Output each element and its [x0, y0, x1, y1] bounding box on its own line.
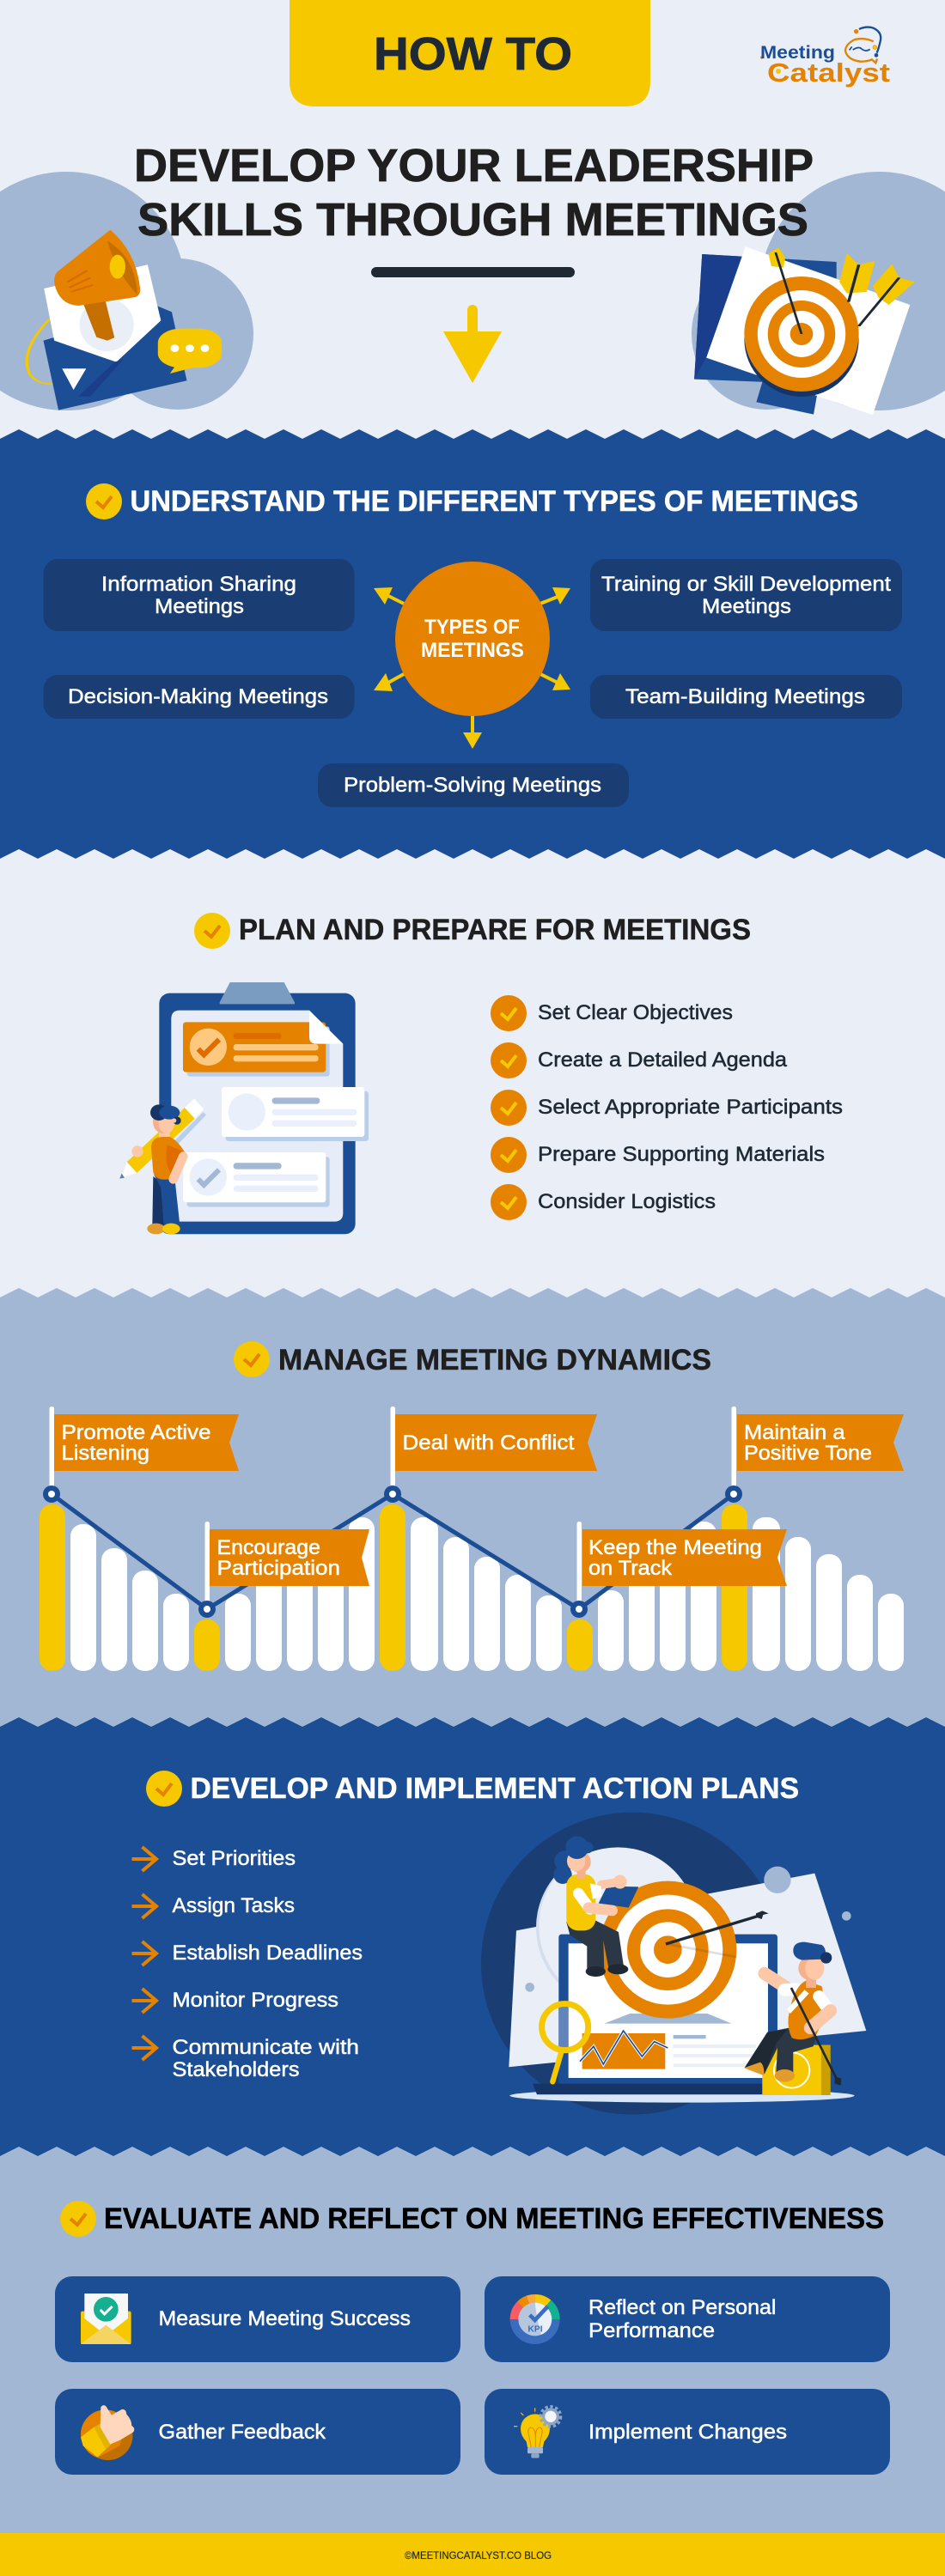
flag: deal with conflict	[384, 1406, 597, 1503]
card: gather feedback: Gather Feedback	[158, 2421, 326, 2444]
panel: manage meeting dynamics	[0, 1288, 945, 1727]
center circle: types of meetings	[395, 562, 550, 716]
icon: KPI gauge: KPI	[527, 2324, 543, 2334]
item: assign tasks: Assign Tasks	[172, 1894, 295, 1917]
center circle: types of meetings: TYPES OF	[424, 616, 520, 639]
logo: Meeting Catalyst: Meeting	[760, 43, 835, 63]
item: monitor progress: Monitor Progress	[172, 1989, 338, 2012]
item: create a detailed agenda	[491, 1042, 788, 1078]
heading: MANAGE MEETING DYNAMICS	[278, 1344, 711, 1376]
item: communicate with stakeholders: Communicate with	[172, 2036, 359, 2059]
flag: encourage participation: Participation	[216, 1557, 340, 1580]
flag: encourage participation	[198, 1522, 369, 1618]
checklist	[491, 995, 843, 1220]
flag: deal with conflict: Deal with Conflict	[402, 1431, 575, 1455]
card: reflect on personal performance: Performance	[588, 2319, 715, 2342]
title: SKILLS THROUGH MEETINGS	[137, 194, 808, 246]
item: establish deadlines: Establish Deadlines	[172, 1941, 363, 1965]
panel: understand the different types of meetings	[0, 429, 945, 859]
item: create a detailed agenda: Create a Detailed Agenda	[538, 1048, 788, 1072]
card: reflect on personal performance	[485, 2276, 890, 2362]
panel: footer: ©MEETINGCATALYST.CO BLOG	[405, 2549, 552, 2561]
item: prepare supporting materials	[491, 1137, 825, 1173]
panel: header	[0, 0, 945, 415]
card: measure meeting success: Measure Meeting Success	[158, 2307, 411, 2330]
item: consider logistics	[491, 1184, 716, 1220]
person: woman sitting on target	[553, 1836, 638, 1977]
item: set priorities	[132, 1847, 296, 1871]
item: communicate with stakeholders	[132, 2036, 359, 2081]
item: set priorities: Set Priorities	[172, 1847, 296, 1870]
item: prepare supporting materials: Prepare Supporting Materials	[538, 1143, 825, 1166]
flag: promote active listening: Listening	[62, 1442, 149, 1465]
card: problem-solving meetings	[318, 763, 629, 807]
heading: DEVELOP AND IMPLEMENT ACTION PLANS	[191, 1772, 799, 1805]
item: communicate with stakeholders: Stakeholders	[172, 2058, 299, 2081]
item: set clear objectives	[491, 995, 733, 1031]
card: decision-making meetings: Decision-Making Meetings	[68, 685, 328, 708]
flag: keep the meeting on track	[570, 1522, 787, 1618]
card: implement changes: Implement Changes	[588, 2421, 787, 2444]
left background blobs	[0, 172, 253, 410]
flag: maintain a positive tone: Maintain a	[744, 1421, 845, 1444]
heading: UNDERSTAND THE DIFFERENT TYPES OF MEETINGS	[131, 485, 858, 518]
clipboard illustration	[119, 982, 372, 1238]
icon: thumbs up	[81, 2405, 134, 2460]
card: training or skill development meetings: Training or Skill Development	[601, 573, 891, 596]
action list	[132, 1847, 363, 2081]
flag: encourage participation: Encourage	[216, 1536, 320, 1559]
flag: keep the meeting on track: Keep the Meeting	[588, 1536, 762, 1559]
arrows from center	[374, 587, 570, 749]
flag: maintain a positive tone	[725, 1406, 904, 1503]
flag: promote active listening	[43, 1406, 239, 1503]
how to badge: HOW TO	[374, 28, 572, 80]
item: set clear objectives: Set Clear Objectives	[538, 1001, 733, 1024]
person with pencil	[119, 1098, 206, 1234]
heading: EVALUATE AND REFLECT ON MEETING EFFECTIVENESS	[104, 2202, 884, 2235]
title	[134, 140, 814, 246]
card: team-building meetings: Team-Building Meetings	[625, 685, 865, 708]
card: team-building meetings	[590, 675, 902, 719]
right background blobs	[692, 172, 945, 410]
card: implement changes	[485, 2389, 890, 2475]
card: gather feedback	[55, 2389, 460, 2475]
yellow box with circle	[762, 2045, 831, 2095]
illustration: target, laptop and people	[481, 1813, 866, 2115]
panel: develop and implement action plans	[0, 1717, 945, 2156]
logo: Meeting Catalyst: Catalyst	[767, 58, 890, 88]
bar chart	[40, 1504, 904, 1671]
heading: PLAN AND PREPARE FOR MEETINGS	[239, 914, 751, 946]
person: man with arrow	[744, 1942, 841, 2086]
icon: KPI gauge	[510, 2294, 560, 2344]
panel: footer	[0, 2533, 945, 2576]
icon: envelope with check	[81, 2293, 131, 2344]
item: select appropriate participants: Select Appropriate Participants	[538, 1096, 843, 1119]
logo: Meeting Catalyst	[760, 27, 890, 88]
trend line	[52, 1494, 734, 1609]
item: consider logistics: Consider Logistics	[538, 1190, 716, 1213]
card: decision-making meetings	[43, 675, 354, 719]
card: information sharing meetings	[43, 559, 354, 631]
title: DEVELOP YOUR LEADERSHIP	[134, 140, 814, 191]
icon: light bulb and gear	[514, 2407, 561, 2458]
flag: promote active listening: Promote Active	[62, 1421, 211, 1444]
card: reflect on personal performance: Reflect on Personal	[588, 2296, 777, 2319]
how to badge	[290, 0, 650, 106]
arrow: down	[443, 305, 502, 383]
flag: keep the meeting on track: on Track	[588, 1557, 673, 1580]
flag: maintain a positive tone: Positive Tone	[744, 1442, 872, 1465]
card: measure meeting success	[55, 2276, 460, 2362]
panel: evaluate and reflect on meeting effectiveness	[0, 2147, 945, 2533]
card: information sharing meetings: Meetings	[155, 595, 244, 618]
panel: plan and prepare for meetings	[119, 913, 843, 1238]
divider bar	[371, 267, 575, 277]
center circle: types of meetings: MEETINGS	[421, 639, 524, 662]
card: information sharing meetings: Information Sharing	[101, 573, 296, 596]
card: problem-solving meetings: Problem-Solving Meetings	[344, 774, 601, 797]
magnifying glass	[542, 2004, 588, 2081]
icon: megaphone and envelope	[27, 230, 222, 410]
card: training or skill development meetings	[590, 559, 902, 631]
icon: target with arrows	[694, 246, 915, 415]
item: select appropriate participants	[491, 1090, 843, 1126]
card: training or skill development meetings: Meetings	[702, 595, 791, 618]
